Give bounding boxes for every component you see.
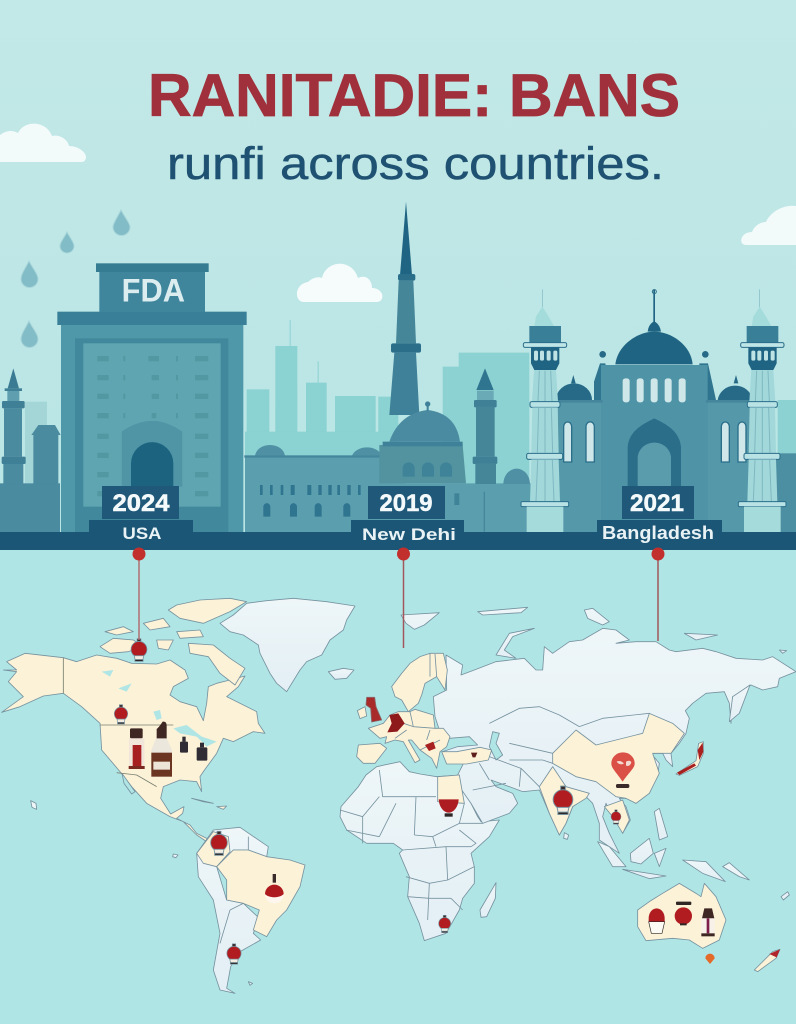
pin line USA	[132, 548, 146, 640]
pin line New Delhi	[397, 548, 410, 648]
world map: Africa, Asia, Australia	[340, 607, 796, 972]
arched side windows	[564, 422, 746, 462]
title: Ranitidine bans: RANITADIE: BANS	[148, 62, 680, 129]
lantern icon: Australia east	[701, 908, 715, 936]
lamp icon: India	[553, 786, 573, 814]
China	[553, 713, 684, 803]
label 2021 Bangladesh	[597, 486, 722, 550]
lamp icon: Egypt/Sudan	[439, 799, 459, 817]
UK red marks	[366, 697, 382, 722]
Brazil	[217, 850, 305, 937]
Canadian Arctic islands	[168, 598, 247, 623]
Scandinavia	[392, 653, 447, 712]
Sumatra and Java	[598, 842, 666, 879]
mosque wings	[558, 400, 751, 532]
minarets	[521, 289, 569, 532]
Australia	[638, 883, 726, 948]
cloud right	[741, 206, 796, 245]
background sea	[0, 550, 796, 1024]
Egypt	[438, 775, 464, 803]
South America borders	[220, 837, 248, 943]
France and Germany red mark	[387, 713, 405, 732]
Borders	[340, 707, 649, 920]
distant blocks	[443, 353, 796, 483]
label 2019 New Delhi	[351, 486, 464, 550]
label 2021 Bangladesh: 2021	[630, 490, 684, 517]
upper windows	[623, 378, 686, 402]
Sakhalin	[729, 685, 750, 722]
lower palace	[386, 483, 536, 532]
label 2019 New Delhi: 2019	[380, 490, 432, 517]
FDA building	[57, 263, 247, 532]
South America pale countries	[197, 827, 268, 993]
Africa	[340, 762, 499, 941]
Turkey marker	[471, 753, 477, 757]
Mainland Europe	[368, 709, 450, 768]
pin line Bangladesh	[652, 548, 664, 641]
main dome	[615, 332, 693, 364]
centre dome	[389, 410, 460, 442]
lamp icon: Colombia	[211, 831, 227, 855]
icon: falling drops	[21, 210, 130, 348]
bottle icon: red syrup	[129, 728, 145, 769]
US borders	[63, 658, 173, 787]
Baffin island	[188, 643, 245, 685]
New Zealand	[754, 949, 780, 972]
timeline band	[0, 532, 796, 550]
subtitle: runfi across countries.	[167, 138, 664, 189]
Novaya Zemlya	[496, 628, 534, 658]
label 2019 New Delhi: New Dehi	[362, 525, 456, 544]
skyline: left with FDA building	[0, 263, 405, 532]
world map: Europe	[357, 653, 492, 768]
Gulf of California	[122, 773, 135, 794]
lamp icon: South Africa	[439, 915, 451, 933]
label 2024 USA: USA	[122, 524, 162, 543]
Ireland	[357, 707, 367, 719]
Greenland	[220, 598, 355, 692]
Arctic islands	[401, 607, 787, 653]
lamp icon: Australia centre	[675, 902, 692, 925]
Europe borders	[395, 712, 440, 750]
mini tower block	[31, 425, 61, 485]
Madagascar	[480, 883, 496, 917]
skyline: centre tower and right mosque	[379, 202, 796, 532]
Philippines	[654, 808, 668, 840]
mid palace	[245, 457, 405, 532]
lamp icon: Argentina	[227, 944, 241, 964]
label 2024 USA: 2024	[112, 490, 170, 517]
lamp icon: Thailand	[611, 810, 621, 824]
mosque side domes	[556, 383, 753, 400]
Turkey	[442, 747, 492, 764]
cloud left	[0, 124, 86, 162]
Colombia	[197, 832, 230, 867]
mosque centre block	[601, 365, 708, 532]
Pacific islands	[723, 863, 789, 900]
small islands	[31, 801, 253, 985]
New Guinea	[683, 860, 725, 882]
Thailand region	[604, 800, 629, 833]
small minaret	[473, 368, 497, 484]
window rows	[97, 356, 208, 496]
Sri Lanka	[564, 833, 569, 839]
Eurasia	[433, 628, 796, 853]
mosque turrets	[594, 363, 716, 400]
North America	[2, 653, 265, 846]
world map: Americas and Greenland	[2, 598, 355, 993]
label 2024 USA	[89, 486, 193, 550]
marker: Tasmania	[705, 954, 715, 964]
Balkans red mark	[425, 742, 436, 751]
pin: China	[611, 752, 635, 788]
Iceland	[328, 668, 354, 679]
bottle icon: small Canada lamp	[131, 639, 147, 661]
lamp icon: Brazil	[265, 874, 284, 903]
lamp icon: western Canada	[114, 705, 128, 724]
Borneo and Sulawesi	[630, 838, 666, 867]
FDA sign: FDA	[122, 272, 185, 308]
Iberia	[357, 743, 387, 763]
Caspian Sea	[489, 732, 503, 760]
bottle icon: small dark bottles	[180, 737, 207, 761]
bottle icon: brown label	[151, 722, 172, 777]
cloud centre	[297, 264, 382, 302]
Japan with red marks	[676, 742, 703, 775]
Caribbean islands	[192, 798, 227, 809]
distant towers	[25, 320, 398, 485]
main gate	[628, 418, 681, 487]
India	[539, 767, 589, 835]
centre spire tower	[389, 202, 421, 415]
background sky	[0, 0, 796, 550]
Great Lakes	[102, 670, 217, 747]
lamp icons: Australia west	[649, 908, 665, 933]
label 2021 Bangladesh: Bangladesh	[602, 523, 714, 543]
mini minaret	[2, 368, 26, 484]
